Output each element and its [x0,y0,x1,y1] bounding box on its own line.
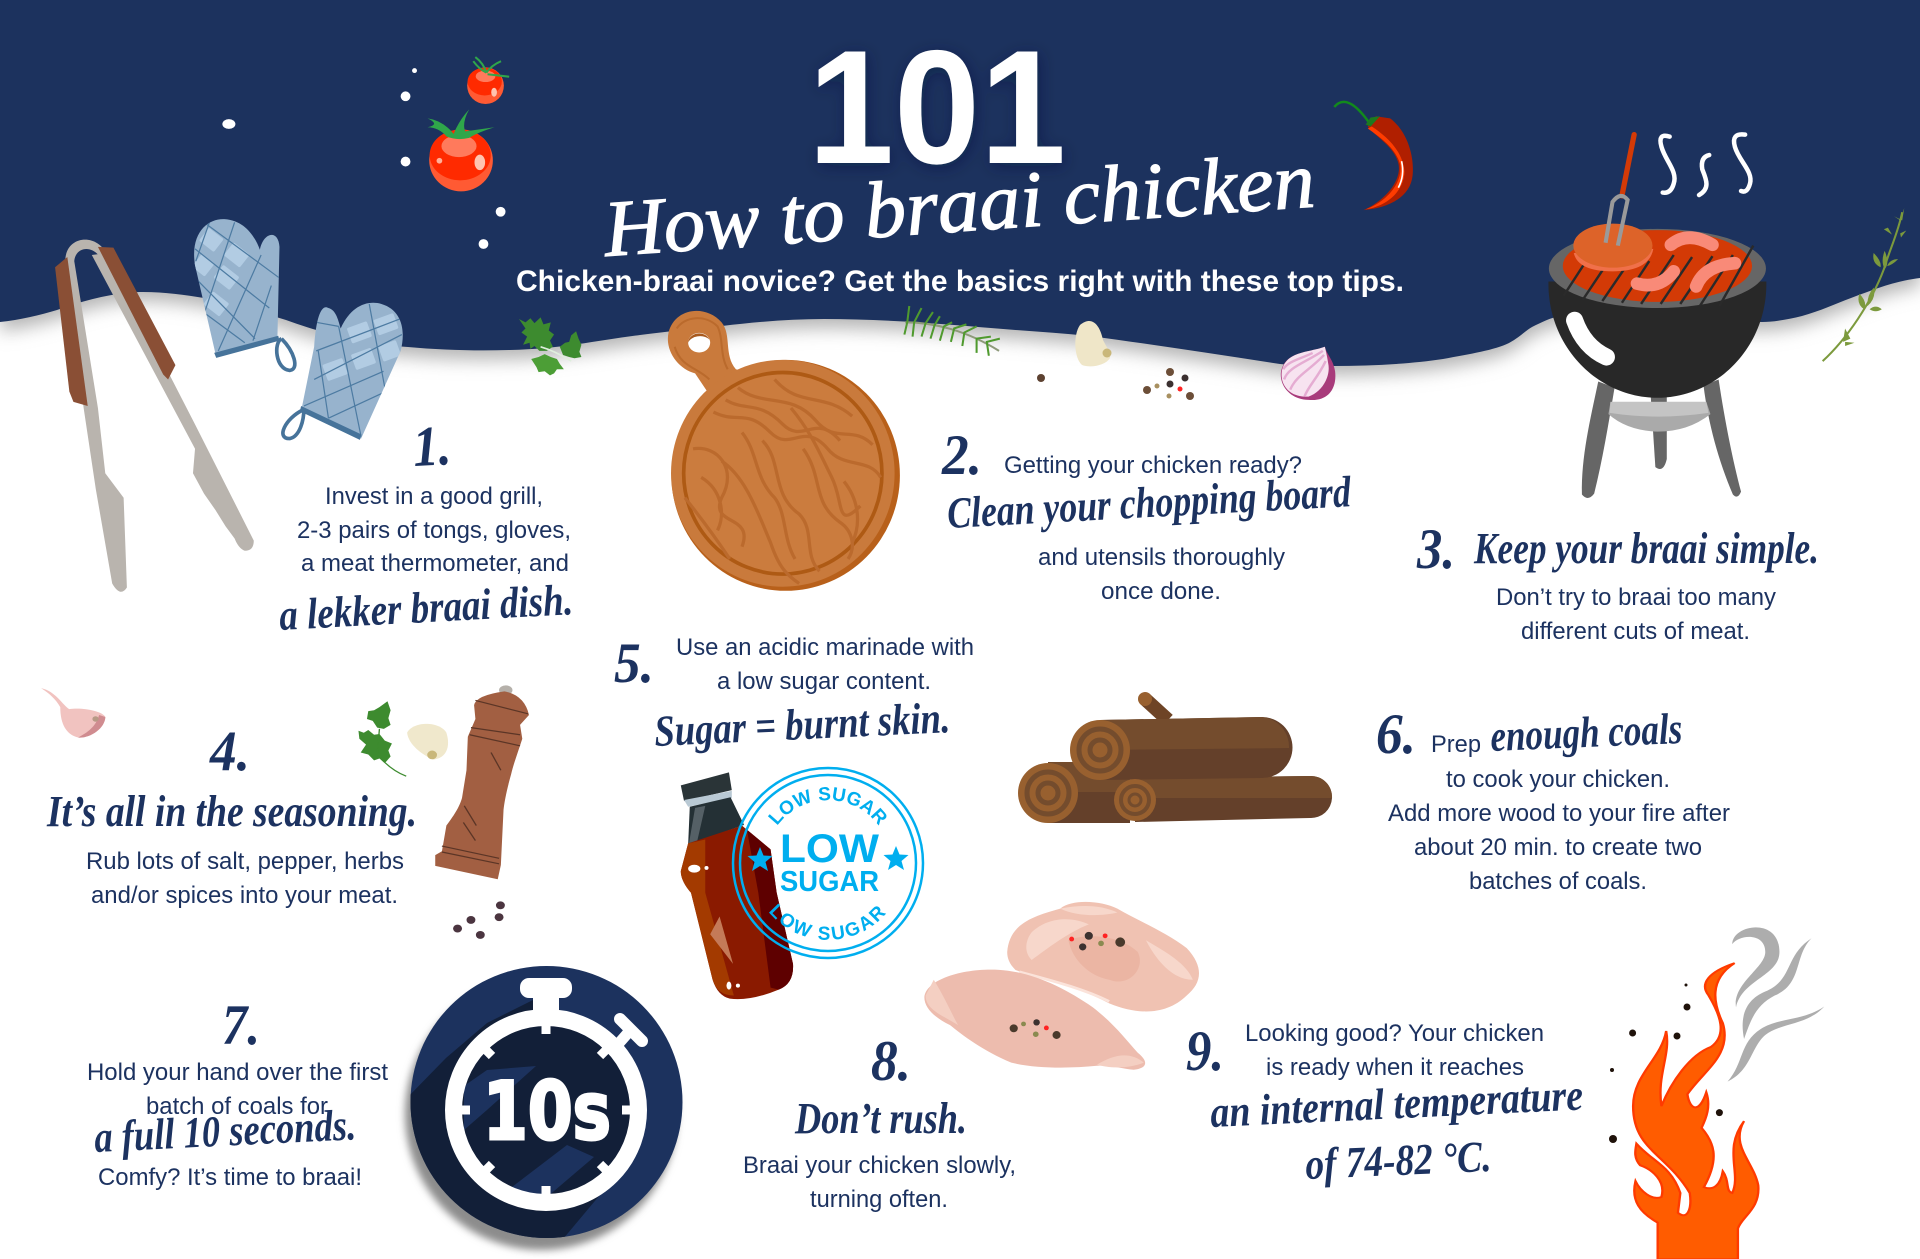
tip 1: a lekker braai dish. [278,575,574,640]
icon: kettle grill [1548,134,1766,498]
icon: top breast [1007,902,1199,1011]
tip 5: a low sugar content. [717,668,931,695]
icon: parsley top [519,317,581,375]
tip 1: 2-3 pairs of tongs, gloves, [297,517,571,544]
header background: navy wave [0,0,1920,366]
tip 1 [278,414,574,640]
icon: left glove [192,219,295,370]
icon: steam [1660,134,1750,195]
stamp stars [748,846,908,871]
tip 6 [1376,703,1730,895]
tip 8: 8. [871,1030,911,1093]
tip 8: Braai your chicken slowly, [743,1152,1016,1179]
stamp curved text bottom: LOW SUGAR [769,904,886,940]
icon: logs [1018,692,1332,823]
tip 1: 1. [411,414,453,479]
icon: bottom breast [924,970,1145,1070]
low sugar stamp [732,766,924,960]
tip 8: Don’t rush. [794,1094,967,1143]
icon: garlic and peppercorns [1037,321,1194,400]
tip 9: Looking good? Your chicken [1245,1020,1544,1047]
tip 7: a full 10 seconds. [93,1100,357,1162]
tip 6: 6. [1376,703,1416,766]
tip 3: different cuts of meat. [1521,618,1750,645]
tip 9: an internal temperature [1209,1070,1584,1137]
tip 5: 5. [614,632,654,695]
tip 7: batch of coals for [146,1093,328,1120]
tip 6: Prep [1431,731,1481,758]
tip 4 [46,720,417,909]
tip 1: Invest in a good grill, [325,483,543,510]
tip 6: Add more wood to your fire after [1388,800,1730,827]
tip 6: to cook your chicken. [1446,766,1670,793]
tip 9: 9. [1186,1020,1224,1083]
icon: parsley and garlic [358,701,448,776]
decorative white dots [222,68,506,249]
tip 2: 2. [941,424,982,487]
tip 3: 3. [1416,518,1455,581]
tip 3: Don’t try to braai too many [1496,584,1777,611]
icon: pink garlic [41,688,105,738]
tip 5: Use an acidic marinade with [676,634,974,661]
tip 4: It’s all in the seasoning. [46,787,417,836]
tip 4: 4. [209,720,250,783]
tip 9: of 74-82 °C. [1304,1132,1492,1189]
icon: embers [1609,984,1723,1143]
tip 2: once done. [1101,578,1221,605]
tip 3 [1416,518,1819,645]
tip 6: enough coals [1489,704,1683,761]
tip 9: is ready when it reaches [1266,1054,1524,1081]
icon: chilli [1334,102,1413,210]
stamp curved text top: LOW SUGAR [768,787,886,826]
tip 7: Comfy? It’s time to braai! [98,1164,362,1191]
icon: smoke [1728,927,1824,1082]
tip 9 [1186,1020,1584,1189]
icon: tomatoes [428,57,509,191]
tip 5 [614,632,974,756]
icon: tongs [55,240,254,592]
timer icon 10s [405,966,682,1250]
tip 1: a meat thermometer, and [301,550,569,577]
wave shadow [0,0,1920,375]
icon: sauce bottle [681,772,793,999]
tip 2: Getting your chicken ready? [1004,452,1302,479]
icon: flame [1633,963,1758,1259]
icon: thyme [1823,208,1906,361]
tip 6: about 20 min. to create two [1414,834,1702,861]
tip 2: Clean your chopping board [946,467,1353,538]
icon: chicken breasts [924,902,1199,1070]
timer label: 10s [483,1065,611,1158]
tip 4: Rub lots of salt, pepper, herbs [86,848,404,875]
icon: flame and smoke [1609,927,1824,1259]
stamp word low: LOW [780,827,879,871]
icon: red onion [1281,342,1335,400]
icon: chopping board [668,311,900,591]
tip 2 [941,424,1353,605]
tip 8: turning often. [810,1186,948,1213]
tip 3: Keep your braai simple. [1473,524,1819,573]
icon: right glove [283,303,403,440]
tip 4: and/or spices into your meat. [91,882,398,909]
tip 7: Hold your hand over the first [87,1059,388,1086]
stamp word sugar: SUGAR [780,866,879,898]
subtitle: Chicken-braai novice? Get the basics right with these top tips. [516,265,1404,298]
tip 7 [87,994,388,1191]
tip 5: Sugar = burnt skin. [653,693,951,756]
title: How to braai chicken: How to braai chicken [600,137,1318,274]
tip 2: and utensils thoroughly [1038,544,1286,571]
tip 6: batches of coals. [1469,868,1647,895]
tip 8 [743,1030,1016,1213]
icon: pepper mill [435,685,529,939]
tip 7: 7. [222,994,260,1057]
icon: oven gloves [192,219,403,440]
icon: rosemary [904,306,1000,356]
title: 101: 101 [808,17,1066,198]
